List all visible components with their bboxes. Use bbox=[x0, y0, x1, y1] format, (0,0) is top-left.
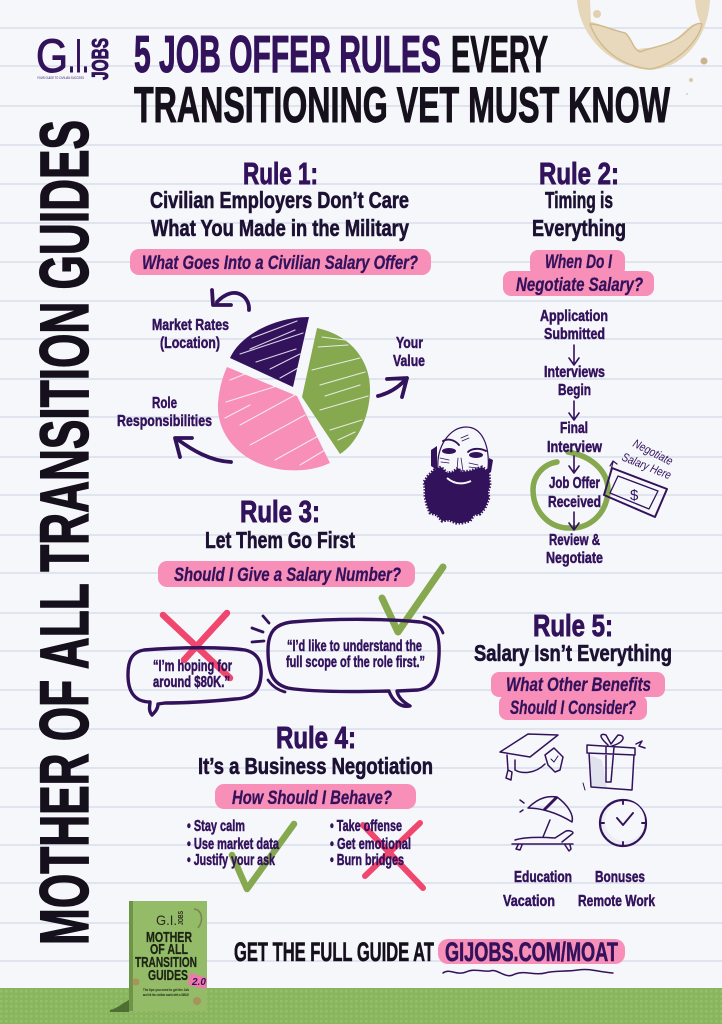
G.I. Jobs logo: YOUR GUIDE TO CIVILIAN SUCCESS bbox=[37, 76, 84, 80]
book cover: MOTHER bbox=[146, 929, 192, 946]
pill: when to negotiate bbox=[503, 250, 654, 296]
pill: url: GIJOBS.COM/MOAT bbox=[445, 937, 618, 967]
label: role responsibilities bbox=[117, 395, 212, 430]
list: don't: • Take offense bbox=[330, 818, 402, 835]
icon: dollar bill bbox=[604, 461, 667, 517]
speech bubble: wrong answer bbox=[128, 648, 261, 715]
list: do: • Stay calm bbox=[187, 818, 245, 835]
speech bubble: right answer: full scope of the role first.” bbox=[286, 654, 425, 671]
book cover: TRANSITION bbox=[135, 954, 197, 971]
panel: rule 4 bbox=[187, 720, 433, 889]
benefit labels: Remote Work bbox=[578, 893, 655, 910]
flow steps bbox=[540, 308, 608, 567]
icon: clock bbox=[600, 800, 646, 846]
book cover: OF ALL bbox=[150, 941, 188, 958]
G.I. Jobs logo: .I. bbox=[68, 29, 89, 82]
emphasis marks bbox=[252, 616, 443, 692]
icon: dollar bill: $ bbox=[630, 487, 639, 504]
icon: bearded man face bbox=[424, 427, 493, 523]
rule 2 heading: Rule 2: bbox=[539, 156, 619, 191]
benefit labels bbox=[503, 869, 655, 910]
flow steps: Job Offer bbox=[549, 475, 600, 492]
label: role responsibilities: Responsibilities bbox=[117, 413, 212, 430]
pill: salary offer question bbox=[130, 249, 431, 275]
speech bubble: wrong answer: around $80K.” bbox=[153, 674, 230, 691]
green check mark bbox=[232, 824, 294, 889]
title: 5 JOB OFFER RULES bbox=[134, 26, 441, 84]
handwritten note: negotiate salary here bbox=[620, 436, 676, 482]
rule 3 subtitle: Let Them Go First bbox=[205, 527, 355, 553]
list: don't: • Burn bridges bbox=[330, 852, 404, 869]
arrow: role responsibilities bbox=[175, 438, 231, 462]
list: do: • Justify your ask bbox=[187, 852, 275, 869]
rule 2 subtitle bbox=[532, 187, 626, 241]
call to action bbox=[234, 937, 625, 976]
arrow: market rates bbox=[212, 290, 249, 310]
icon: beach umbrella and lounger bbox=[512, 797, 573, 851]
icon: gift box bbox=[583, 734, 645, 790]
pill: salary offer question: What Goes Into a Civilian Salary Offer? bbox=[142, 253, 418, 274]
rule 1 subtitle: Civilian Employers Don’t Care bbox=[150, 187, 409, 213]
handwritten note: negotiate salary here: Negotiate bbox=[631, 436, 676, 468]
book cover: 2.0 bbox=[191, 977, 206, 988]
flow steps: Interview bbox=[547, 439, 602, 456]
list: don't bbox=[330, 818, 411, 869]
speech bubble: right answer: “I’d like to understand the bbox=[287, 638, 422, 655]
handwritten note: negotiate salary here: Salary Here bbox=[620, 450, 674, 482]
book cover: GUIDES bbox=[148, 967, 188, 984]
pill: benefits question: What Other Benefits bbox=[506, 675, 651, 696]
benefit labels: Vacation bbox=[503, 893, 555, 910]
label: market rates: Market Rates bbox=[152, 317, 229, 334]
flow steps: Negotiate bbox=[546, 550, 603, 567]
rule 2 subtitle: Timing is bbox=[545, 187, 613, 213]
label: role responsibilities: Role bbox=[152, 395, 177, 412]
green highlight circle bbox=[533, 452, 608, 528]
flow steps: Received bbox=[548, 494, 601, 511]
green grass band bbox=[0, 988, 722, 1024]
pill: benefits question: Should I Consider? bbox=[510, 698, 636, 719]
rule 1 subtitle bbox=[150, 187, 409, 241]
book cover: The tips you need to get the Job bbox=[143, 988, 190, 992]
rule 1 subtitle: What You Made in the Military bbox=[151, 215, 409, 241]
panel: rule 3 bbox=[128, 494, 443, 715]
benefit labels: Education bbox=[514, 869, 572, 886]
panel: rule 2 bbox=[503, 156, 676, 567]
icon: coffee stain bbox=[577, 0, 710, 95]
flow arrows bbox=[569, 345, 579, 530]
pie chart bbox=[218, 317, 370, 470]
G.I. Jobs logo: G bbox=[36, 29, 68, 82]
benefit labels: Bonuses bbox=[595, 869, 645, 886]
book cover: JOBS bbox=[178, 911, 185, 925]
rule 2 subtitle: Everything bbox=[532, 215, 626, 241]
list: do: • Use market data bbox=[187, 836, 279, 853]
list: do bbox=[187, 818, 279, 869]
red cross mark bbox=[163, 613, 230, 678]
G.I. Jobs logo bbox=[36, 29, 113, 82]
pill: salary number question: Should I Give a Salary Number? bbox=[174, 565, 401, 586]
call to action: GET THE FULL GUIDE AT bbox=[234, 937, 434, 967]
rule 4 subtitle: It’s a Business Negotiation bbox=[198, 753, 433, 779]
icon: graduation cap bbox=[500, 734, 563, 780]
flow steps: Application bbox=[540, 308, 608, 325]
pill: when to negotiate: When Do I bbox=[545, 252, 613, 273]
flow steps: Submitted bbox=[544, 326, 605, 343]
label: your value: Value bbox=[393, 353, 425, 370]
flow steps: Final bbox=[560, 420, 588, 437]
list: don't: • Get emotional bbox=[330, 836, 411, 853]
pill: when to negotiate: Negotiate Salary? bbox=[516, 275, 643, 296]
rule 4 heading: Rule 4: bbox=[276, 720, 356, 755]
label: your value bbox=[393, 335, 425, 370]
rule 3 heading: Rule 3: bbox=[240, 494, 320, 529]
label: market rates bbox=[152, 317, 229, 352]
panel: rule 5 bbox=[474, 608, 672, 910]
rule 1 heading: Rule 1: bbox=[243, 156, 318, 191]
pill: behaviour question: How Should I Behave? bbox=[232, 788, 392, 809]
rule 5 subtitle: Salary Isn’t Everything bbox=[474, 640, 672, 666]
flow steps: Review & bbox=[549, 532, 600, 549]
red cross mark bbox=[363, 823, 423, 888]
arrow: your value bbox=[378, 378, 407, 397]
book cover: G.I. bbox=[156, 912, 177, 928]
pill: url bbox=[438, 937, 625, 967]
flow steps: Begin bbox=[558, 382, 591, 399]
title: EVERY bbox=[451, 26, 548, 84]
speech bubble: wrong answer: “I’m hoping for bbox=[153, 658, 232, 675]
book cover bbox=[110, 901, 207, 1012]
G.I. Jobs logo: JOBS bbox=[87, 38, 113, 80]
flow steps: Interviews bbox=[544, 364, 605, 381]
title bbox=[134, 26, 671, 133]
panel: rule 1 bbox=[117, 156, 431, 470]
book cover: and hit the civilian world with a SMILE bbox=[143, 993, 189, 997]
label: market rates: (Location) bbox=[160, 335, 220, 352]
speech bubble: right answer bbox=[268, 619, 439, 706]
pill: benefits question bbox=[491, 672, 665, 720]
green check mark bbox=[382, 567, 443, 632]
label: your value: Your bbox=[396, 335, 423, 352]
pill: salary number question bbox=[158, 561, 415, 587]
flow chart timeline bbox=[533, 308, 608, 567]
rule 5 heading: Rule 5: bbox=[533, 608, 613, 643]
